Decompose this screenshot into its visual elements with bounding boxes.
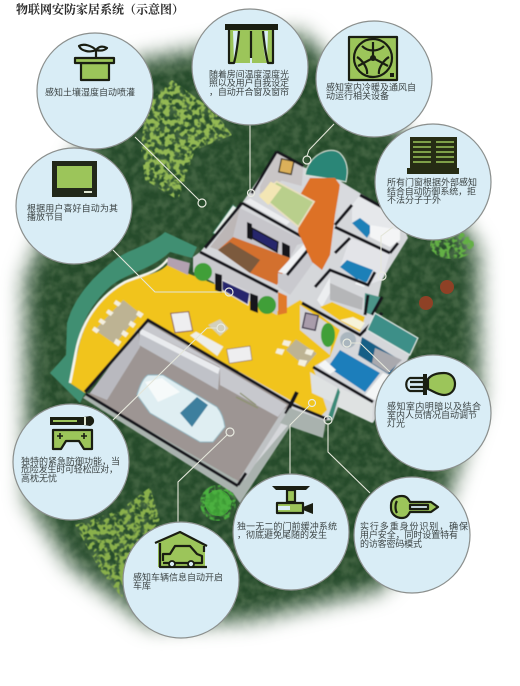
icon: shutters bbox=[407, 137, 459, 174]
yellow living floor bbox=[70, 265, 340, 417]
potted plants bbox=[194, 263, 276, 314]
text: ventilation bbox=[326, 82, 416, 101]
text: lighting bbox=[387, 400, 481, 428]
wall highlight bbox=[70, 259, 168, 383]
callout line: curtains bbox=[248, 125, 254, 196]
panel: windows bbox=[375, 124, 491, 240]
lower front wall bbox=[310, 367, 373, 423]
shrub: right with red fruit bbox=[419, 231, 474, 310]
icon: key bbox=[391, 496, 438, 518]
spiky shrub bbox=[200, 485, 236, 521]
bicycle bbox=[236, 393, 258, 408]
dining table left bbox=[92, 300, 144, 346]
closet bbox=[315, 270, 380, 332]
callout line: windows bbox=[378, 227, 393, 280]
panel: key access bbox=[354, 477, 470, 593]
garage left wall bbox=[90, 328, 140, 400]
text: television: 播放节目 bbox=[27, 211, 63, 222]
text: windows bbox=[387, 176, 477, 205]
outer shell of building bbox=[200, 152, 418, 503]
panel: ventilation bbox=[316, 21, 432, 137]
callout line: emergency defence bbox=[113, 324, 225, 420]
bedroom walls and bed bbox=[245, 152, 314, 227]
icon: house with car bbox=[155, 532, 207, 567]
living room front wall bbox=[193, 252, 278, 315]
text: lighting: 感知室内明暗以及结合 bbox=[387, 400, 481, 412]
text: key access bbox=[360, 520, 468, 549]
text: emergency defence: 危险发生时可轻松应对， bbox=[21, 464, 118, 474]
callout line: television bbox=[113, 250, 233, 296]
text: curtains: 随着房间温度湿度光 bbox=[209, 68, 289, 80]
text: entry buffer bbox=[237, 520, 337, 540]
pool room lower right bbox=[318, 332, 402, 400]
text: lighting: 室内人员情况自动调节 bbox=[387, 409, 477, 420]
panel: lighting bbox=[375, 355, 491, 471]
text: key access: 用户安全，同时设置特有 bbox=[360, 529, 458, 540]
icon: light bulb bbox=[406, 373, 455, 395]
media room bbox=[205, 203, 315, 295]
dining table right bbox=[275, 339, 317, 367]
text: emergency defence: 独特的紧急防御功能，当 bbox=[21, 456, 120, 466]
bedroom orange floor bbox=[298, 178, 340, 270]
text: windows: 不法分子于外 bbox=[387, 194, 441, 205]
panel: television bbox=[16, 148, 132, 264]
text: emergency defence bbox=[21, 456, 120, 484]
storage cabinets bbox=[139, 328, 220, 390]
flower bed bbox=[167, 257, 190, 275]
icon: microphone and gamepad bbox=[50, 416, 94, 449]
bush: upper left bbox=[141, 80, 232, 200]
text: entry buffer: ，彻底避免尾随的发生 bbox=[237, 529, 327, 540]
text: ventilation: 感知室内冷暖及通风自 bbox=[326, 82, 416, 92]
text: garage: 感知车辆信息自动开启 bbox=[133, 572, 223, 582]
text: lighting: 灯光 bbox=[387, 418, 405, 428]
garage floor bbox=[88, 322, 293, 482]
panel: curtains bbox=[192, 9, 308, 125]
icon: curtains bbox=[225, 24, 278, 63]
living tv bbox=[215, 273, 258, 313]
callout line: key access bbox=[324, 416, 370, 493]
bush: lower left bbox=[75, 487, 160, 598]
text: garage bbox=[133, 572, 223, 591]
icon: potted plant bbox=[75, 45, 114, 80]
text: television: 根据用户喜好自动为其 bbox=[27, 202, 118, 214]
sofas bbox=[171, 312, 252, 363]
text: television bbox=[27, 202, 118, 222]
text: windows: 结合自动防御系统，拒 bbox=[387, 186, 476, 196]
text: garage: 车库 bbox=[133, 580, 151, 591]
panel: soil sensing bbox=[37, 33, 153, 149]
callout line: entry buffer bbox=[290, 400, 316, 475]
garage black walls bbox=[85, 320, 293, 486]
icon: fan bbox=[349, 37, 397, 80]
text: key access: 的访客密码模式 bbox=[360, 538, 422, 549]
text: entry buffer: 独一无二的门前缓冲系统 bbox=[237, 520, 337, 532]
callout line: ventilation bbox=[303, 124, 334, 164]
icon: television bbox=[52, 161, 97, 197]
garage outer wall bbox=[83, 393, 298, 503]
callout line: garage bbox=[178, 428, 234, 522]
text: curtains: 照以及用户自我设定 bbox=[209, 77, 289, 88]
icon: camera bbox=[272, 486, 313, 514]
upper bathroom bbox=[335, 183, 400, 287]
teal pool bbox=[305, 150, 347, 182]
teal glass bbox=[367, 313, 418, 355]
floor plan of the house bbox=[50, 150, 418, 503]
callout line: lighting bbox=[343, 339, 390, 372]
text: windows: 所有门窗根据外部感知 bbox=[387, 176, 477, 188]
text: soil sensing: 感知土壤湿度自动喷灌 bbox=[45, 86, 135, 98]
panel: garage bbox=[123, 522, 239, 638]
perimeter garden wall bbox=[50, 232, 197, 403]
callout line: soil sensor bbox=[135, 137, 206, 207]
text: curtains: ，自动开合窗及窗帘 bbox=[209, 86, 289, 97]
panel: entry buffer bbox=[233, 474, 349, 590]
text: curtains bbox=[209, 68, 289, 97]
text: emergency defence: 高枕无忧 bbox=[21, 472, 57, 484]
right garage wall bbox=[240, 405, 293, 480]
text: key access: 实行多重身份识别，确保 bbox=[360, 520, 468, 532]
panel: emergency defence bbox=[13, 404, 129, 520]
image frame wall bbox=[300, 297, 382, 355]
title: 物联网安防家居系统（示意图） bbox=[16, 2, 184, 16]
car bbox=[137, 375, 225, 442]
text: ventilation: 动运行相关设备 bbox=[326, 90, 389, 101]
garage back wall bbox=[140, 323, 287, 417]
